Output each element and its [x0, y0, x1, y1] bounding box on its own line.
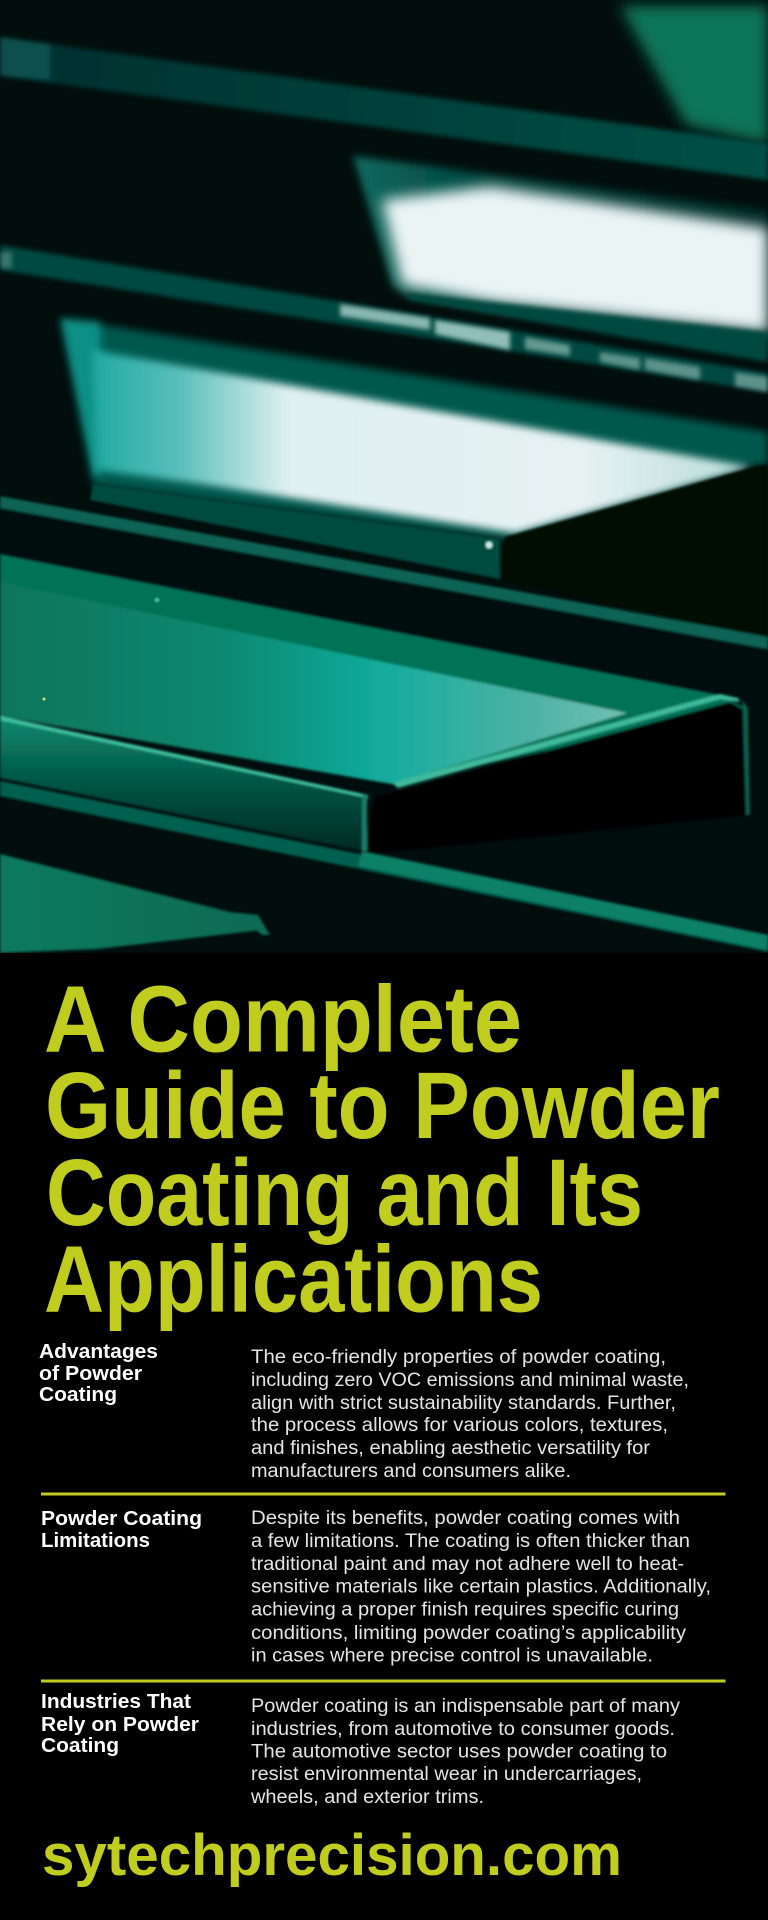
body text: limitations: traditional paint and may not adhere well to heat- — [251, 1554, 684, 1575]
body text: advantages: including zero VOC emissions and minimal waste, — [251, 1370, 689, 1391]
heading: industries: Coating — [41, 1734, 119, 1757]
section: advantages of powder coating — [39, 1340, 689, 1482]
body text: limitations: conditions, limiting powder coating’s applicability — [251, 1623, 687, 1644]
body text: industries: Powder coating is an indispensable part of many — [251, 1696, 681, 1717]
body text: industries: industries, from automotive to consumer goods. — [251, 1719, 675, 1740]
body text: limitations — [251, 1508, 711, 1666]
body text: advantages: the process allows for various colors, textures, — [251, 1415, 668, 1436]
heading: advantages: Advantages — [39, 1340, 158, 1363]
title: Coating and Its — [46, 1140, 643, 1246]
large green tray — [0, 554, 750, 855]
title: A Complete — [44, 966, 522, 1072]
body text: industries — [250, 1696, 681, 1808]
body text: advantages: manufacturers and consumers alike. — [251, 1461, 571, 1482]
hero photo: powder-coated metal trays — [0, 0, 768, 953]
white reflection upper — [382, 186, 768, 332]
body text: limitations: in cases where precise control is unavailable. — [251, 1646, 653, 1666]
body text: advantages — [251, 1347, 689, 1482]
panel lower: teal surround — [60, 318, 768, 540]
body text: advantages: align with strict sustainability standards. Further, — [251, 1393, 676, 1414]
sparkles on second rail — [0, 252, 768, 392]
section: industries that rely on powder coating — [41, 1690, 681, 1808]
heading: advantages: Coating — [39, 1383, 117, 1406]
body text: industries: wheels, and exterior trims. — [250, 1787, 484, 1808]
white panel lower — [92, 350, 752, 533]
body text: industries: The automotive sector uses powder coating to — [251, 1742, 667, 1762]
body text: limitations: Despite its benefits, powder coating comes with — [251, 1508, 680, 1529]
heading: advantages: of Powder — [39, 1362, 142, 1385]
heading: industries: Rely on Powder — [41, 1713, 199, 1736]
body text: industries: resist environmental wear in undercarriages, — [251, 1764, 642, 1785]
body text: limitations: sensitive materials like certain plastics. Additionally, — [251, 1576, 711, 1598]
body text: limitations: achieving a proper finish requires specific curing — [251, 1600, 679, 1620]
body text: advantages: The eco-friendly properties of powder coating, — [251, 1347, 666, 1368]
body text: advantages: and finishes, enabling aesthetic versatility for — [251, 1438, 651, 1459]
black lower panel background — [0, 953, 768, 1920]
heading: limitations: Powder Coating — [41, 1507, 202, 1530]
section: powder coating limitations — [41, 1507, 711, 1666]
title — [44, 966, 720, 1332]
heading: limitations — [41, 1507, 202, 1552]
body text: limitations: a few limitations. The coating is often thicker than — [251, 1531, 690, 1552]
title: Applications — [44, 1226, 543, 1332]
heading: industries: Industries That — [41, 1690, 191, 1713]
heading: industries — [41, 1690, 199, 1757]
heading: advantages — [39, 1340, 158, 1406]
website url: sytechprecision.com — [42, 1823, 622, 1888]
heading: limitations: Limitations — [41, 1529, 150, 1552]
